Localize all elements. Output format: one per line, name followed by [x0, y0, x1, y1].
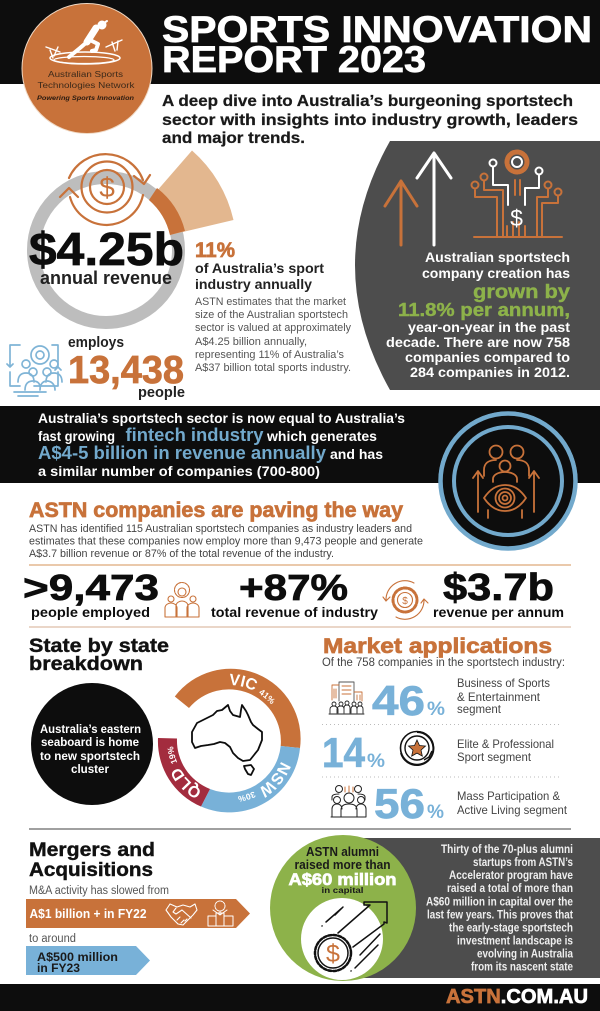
icon: rising dollar arrow [315, 902, 387, 971]
header band [0, 0, 600, 84]
text: ASTN companies description: estimates that these companies now employ more than 9,473 people and generate [29, 536, 423, 548]
arrow: FY22: A$1 billion + in FY22 [30, 907, 147, 921]
callout: alumni raised: raised more than [294, 858, 390, 872]
logo badge: Australian Sports [48, 70, 123, 79]
employs stat: people [138, 384, 185, 401]
stat: revenue per annum: revenue per annum [433, 604, 564, 620]
11% wedge [149, 150, 234, 235]
text: M&A slowed: M&A activity has slowed from [29, 885, 169, 897]
stat: people employed: >9,473 [23, 567, 159, 608]
heading: market applications [322, 634, 565, 669]
revenue donut chart [29, 150, 234, 322]
stat: total revenue [211, 567, 378, 620]
panel: fintech comparison band: and has [330, 447, 383, 462]
title: SPORTS INNOVATION [162, 9, 592, 50]
icon: team with gear [165, 582, 199, 617]
panel: accelerator text [345, 838, 600, 978]
market row: business of sports: segment [457, 702, 502, 716]
callout: eastern seaboard: Australia’s eastern [40, 724, 141, 736]
panel: fintech comparison band: Australia’s sportstech sector is now equal to Australia’s [38, 411, 405, 426]
11% stat text: of Australia’s sport [195, 260, 324, 276]
market row: business of sports: % [427, 699, 445, 720]
icon: runner on track [46, 21, 122, 64]
icon: employees group [7, 345, 62, 396]
state ring chart: NSW 30% [238, 762, 291, 802]
icon: circuit with gear and dollar [472, 152, 562, 237]
panel: accelerator text: startups from ASTN’s [473, 857, 573, 869]
icon: map of Australia [192, 705, 262, 775]
growth text: decade. There are now 758 [386, 335, 571, 350]
panel: accelerator text: Accelerator program have [449, 870, 573, 882]
market row: elite sport: Elite & Professional [457, 737, 554, 751]
logo badge: Powering Sports Innovation [37, 95, 134, 102]
growth text [386, 249, 571, 380]
footer band: ASTN.COM.AU [446, 986, 588, 1008]
growth text: companies compared to [405, 350, 570, 365]
panel: fintech comparison band: which generates [266, 429, 377, 444]
arrow: FY23: A$500 million [37, 950, 118, 964]
market row: business of sports: 46 [372, 677, 425, 724]
callout: eastern seaboard [31, 683, 153, 805]
text: to around: to around [29, 933, 76, 945]
callout: alumni raised: in capital [322, 885, 364, 895]
employs stat: employs [68, 334, 124, 351]
heading: state by state [29, 636, 169, 675]
stat: revenue per annum [433, 567, 564, 620]
heading: ASTN companies: ASTN companies are paving the way [29, 498, 403, 522]
market row: mass participation: % [427, 802, 444, 823]
revenue donut chart: $4.25b [29, 223, 184, 275]
state ring chart: QLD 19% [168, 746, 200, 798]
callout: eastern seaboard: seaboard is home [41, 737, 139, 749]
panel: accelerator text: last few years. This proves that [427, 910, 573, 922]
panel: accelerator text: Thirty of the 70-plus alumni [441, 844, 573, 856]
title [162, 9, 592, 80]
logo badge: Technologies Network [38, 81, 136, 90]
revenue donut chart: annual revenue [40, 268, 172, 288]
icon badge: audience and eye [439, 412, 577, 550]
panel: fintech comparison band [0, 406, 600, 483]
panel: fintech comparison band: fast growing [38, 429, 115, 444]
intro text: sector with insights into industry growth, leaders [162, 112, 578, 129]
11% stat text [195, 239, 351, 374]
stat: total revenue: total revenue of industry [211, 604, 378, 620]
text: ASTN companies description: A$3.7 billion revenue or 87% of the total revenue of the industry. [29, 548, 334, 560]
VIC segment [175, 669, 301, 748]
market row: mass participation: Mass Participation & [457, 789, 560, 803]
11% stat text: representing 11% of Australia’s [195, 349, 344, 361]
panel: accelerator text: A$60 million in capital over the [426, 896, 573, 908]
title: REPORT 2023 [162, 39, 426, 80]
heading: state by state: breakdown [29, 654, 143, 675]
heading: market applications: Market applications [323, 634, 552, 658]
panel: accelerator text: evolving in Australia [477, 948, 574, 960]
icon: handshake [166, 904, 197, 925]
intro text [162, 93, 578, 147]
market row: elite sport: % [367, 751, 385, 772]
growth text: 284 companies in 2012. [410, 365, 570, 380]
11% stat text: 11% [195, 239, 235, 262]
stat: revenue per annum: $3.7b [443, 567, 554, 609]
11% stat text: ASTN estimates that the market [195, 296, 346, 308]
intro text: A deep dive into Australia’s burgeoning sportstech [162, 93, 573, 110]
employs stat: 13,438 [68, 349, 184, 392]
stat: total revenue: +87% [239, 567, 348, 608]
arrow: FY23 [26, 946, 150, 975]
11% stat text: size of the Australian sportstech [195, 309, 348, 321]
heading: mergers and acquisitions: Acquisitions [29, 860, 153, 881]
growth text: company creation has [422, 265, 570, 281]
market row: mass participation [331, 780, 568, 827]
icon: buildings and crowd [329, 682, 364, 714]
growth text: year-on-year in the past [408, 320, 571, 335]
panel: company creation growth [355, 141, 600, 390]
11% stat text: industry annually [195, 276, 312, 292]
icon: circuit with gear and dollar: $ [510, 205, 523, 231]
intro text: and major trends. [162, 130, 305, 147]
icon: dollar coin with cycle arrows [60, 154, 150, 225]
market row: mass participation: Active Living segment [457, 803, 568, 817]
text: ASTN companies description [29, 523, 423, 560]
icon: buildings and gear [208, 901, 233, 926]
11% stat text: A$4.25 billion annually, [195, 336, 307, 348]
stat: people employed [23, 567, 159, 620]
QLD segment [158, 738, 210, 806]
icon: dollar coin with cycle arrows: $ [99, 172, 115, 203]
icon: people group [331, 786, 366, 817]
market row: elite sport: Sport segment [457, 750, 532, 764]
market row: elite sport: 14 [322, 729, 366, 776]
growth text: 11.8% per annum, [398, 300, 570, 320]
text: ASTN companies description: ASTN has identified 115 Australian sportstech companies as industry leaders and [29, 523, 412, 535]
market row: business of sports [329, 676, 550, 724]
market row: business of sports: Business of Sports [457, 676, 550, 690]
panel: accelerator text: the early-stage sportstech [449, 922, 573, 934]
heading: mergers and acquisitions: Mergers and [29, 840, 155, 861]
icon: gear coin [383, 581, 428, 619]
icon: gear coin: $ [402, 596, 408, 607]
heading: state by state: State by state [29, 636, 169, 657]
icon: rising dollar arrow: $ [326, 940, 340, 968]
state ring chart [158, 668, 301, 812]
market row: elite sport [322, 729, 554, 776]
arrow: FY23: in FY23 [37, 961, 80, 975]
11% stat text: sector is valued at approximately [195, 322, 351, 334]
panel: accelerator text: investment landscape is [457, 936, 573, 948]
footer band [0, 984, 600, 1011]
market row: mass participation: 56 [374, 780, 425, 827]
callout: alumni raised: A$60 million [288, 871, 396, 889]
callout: eastern seaboard: cluster [71, 764, 110, 776]
heading: mergers and acquisitions [29, 840, 155, 881]
11% stat text: A$37 billion total sports industry. [195, 362, 351, 374]
panel: fintech comparison band: fintech industry [126, 425, 264, 445]
panel: fintech comparison band: a similar number of companies (700-800) [38, 464, 320, 479]
heading: market applications: Of the 758 companies in the sportstech industry: [322, 657, 565, 669]
growth text: Australian sportstech [425, 249, 570, 265]
callout: eastern seaboard: to new sportstech [40, 751, 140, 763]
callout: alumni raised [270, 835, 416, 981]
arrow: FY22 [26, 899, 250, 928]
logo badge [22, 4, 152, 134]
state ring chart: VIC 41% [230, 674, 275, 704]
stat: people employed: people employed [31, 604, 150, 620]
panel: accelerator text: raised a total of more than [447, 883, 573, 895]
icon: growth arrows [385, 153, 451, 245]
icon: star badge [400, 732, 434, 765]
market row: business of sports: & Entertainment [457, 690, 541, 704]
panel: fintech comparison band: A$4-5 billion in revenue annually [38, 443, 326, 463]
NSW segment [201, 746, 300, 812]
growth text: grown by [473, 282, 570, 303]
employs stat [68, 334, 185, 401]
panel: accelerator text: from its nascent state [471, 962, 573, 974]
callout: alumni raised: ASTN alumni [306, 845, 379, 859]
